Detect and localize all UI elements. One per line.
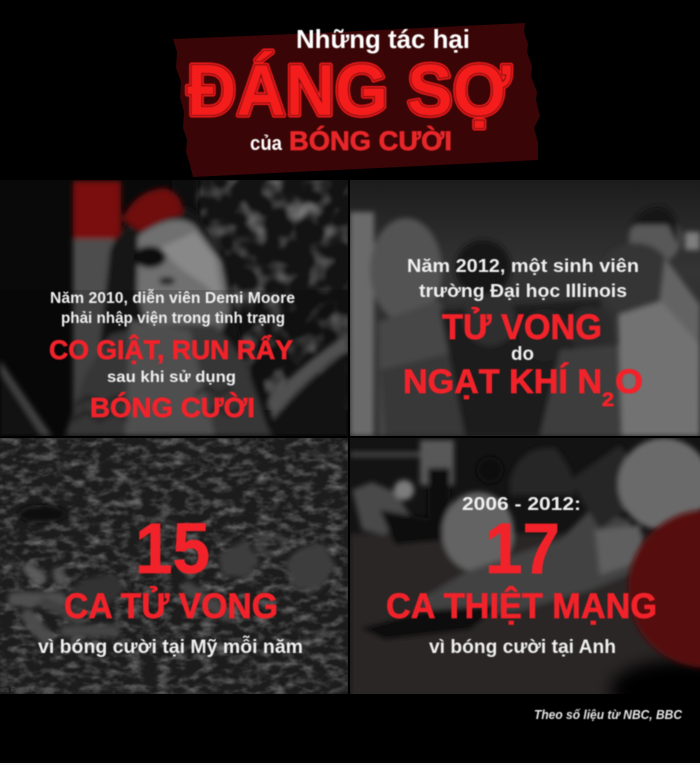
text: sau khi sử dụng: sau khi sử dụng bbox=[107, 369, 236, 386]
text: co giật, run rẩy: CO GIẬT, RUN RẨY bbox=[49, 334, 293, 365]
text: photo credit: ws Press Agency bbox=[0, 687, 56, 694]
text: number 15: 15 bbox=[135, 510, 210, 589]
text: ngạt khí N2O: NGẠT KHÍ N bbox=[403, 363, 602, 401]
panel: Demi Moore 2010 bbox=[0, 170, 348, 436]
heading: bóng cười: BÓNG CƯỜI bbox=[289, 125, 452, 156]
text: US annual caption: vì bóng cười tại Mỹ mỗi năm bbox=[38, 634, 303, 658]
heading: đáng sợ: ĐÁNG SỢ bbox=[187, 51, 512, 131]
photo: festival crowd with balloons bbox=[350, 438, 700, 720]
text: 2010 intro: Năm 2010, diễn viên Demi Moore bbox=[50, 290, 295, 307]
panel: 17 deaths in the UK bbox=[350, 438, 700, 720]
panel: 15 deaths in the US bbox=[0, 438, 348, 694]
text: do: do bbox=[511, 344, 534, 365]
text: number 17: 17 bbox=[485, 510, 560, 589]
text: date range: 2006 - 2012: bbox=[462, 493, 581, 514]
photo: canisters and balloons on grass bbox=[0, 438, 348, 694]
text: bóng cười: BÓNG CƯỜI bbox=[90, 392, 255, 423]
photo: woman shielding her face bbox=[0, 170, 348, 436]
torn tape background bbox=[173, 23, 540, 177]
text: 2012 intro bbox=[407, 256, 639, 301]
text: tử vong: TỬ VONG bbox=[442, 307, 602, 347]
text: ngạt khí N2O: 2 bbox=[602, 390, 614, 411]
heading: đáng sợ: ĐÁNG SỢ bbox=[187, 51, 512, 131]
text: ca tử vong: CA TỬ VONG bbox=[64, 586, 278, 626]
source note: Theo số liệu từ NBC, BBC bbox=[534, 708, 683, 722]
text: 2010 intro bbox=[50, 290, 295, 327]
text: 2010 intro: phải nhập viện trong tình trạng bbox=[61, 310, 285, 327]
title banner bbox=[173, 23, 540, 177]
panel: Illinois student 2012 bbox=[350, 180, 700, 436]
text: UK caption: vì bóng cười tại Anh bbox=[429, 636, 616, 658]
text: 2012 intro: trường Đại học Illinois bbox=[419, 281, 627, 301]
photo: students inhaling balloons bbox=[350, 180, 700, 436]
text: ca thiệt mạng: CA THIỆT MẠNG bbox=[386, 586, 657, 626]
text: 2012 intro: Năm 2012, một sinh viên bbox=[407, 256, 639, 276]
text: ngạt khí N2O bbox=[403, 363, 643, 411]
heading: của: của bbox=[250, 133, 283, 155]
heading: những tác hại: Những tác hại bbox=[296, 24, 470, 54]
text: ngạt khí N2O: O bbox=[615, 363, 643, 401]
heading: đáng sợ: ĐÁNG SỢ bbox=[187, 51, 512, 131]
